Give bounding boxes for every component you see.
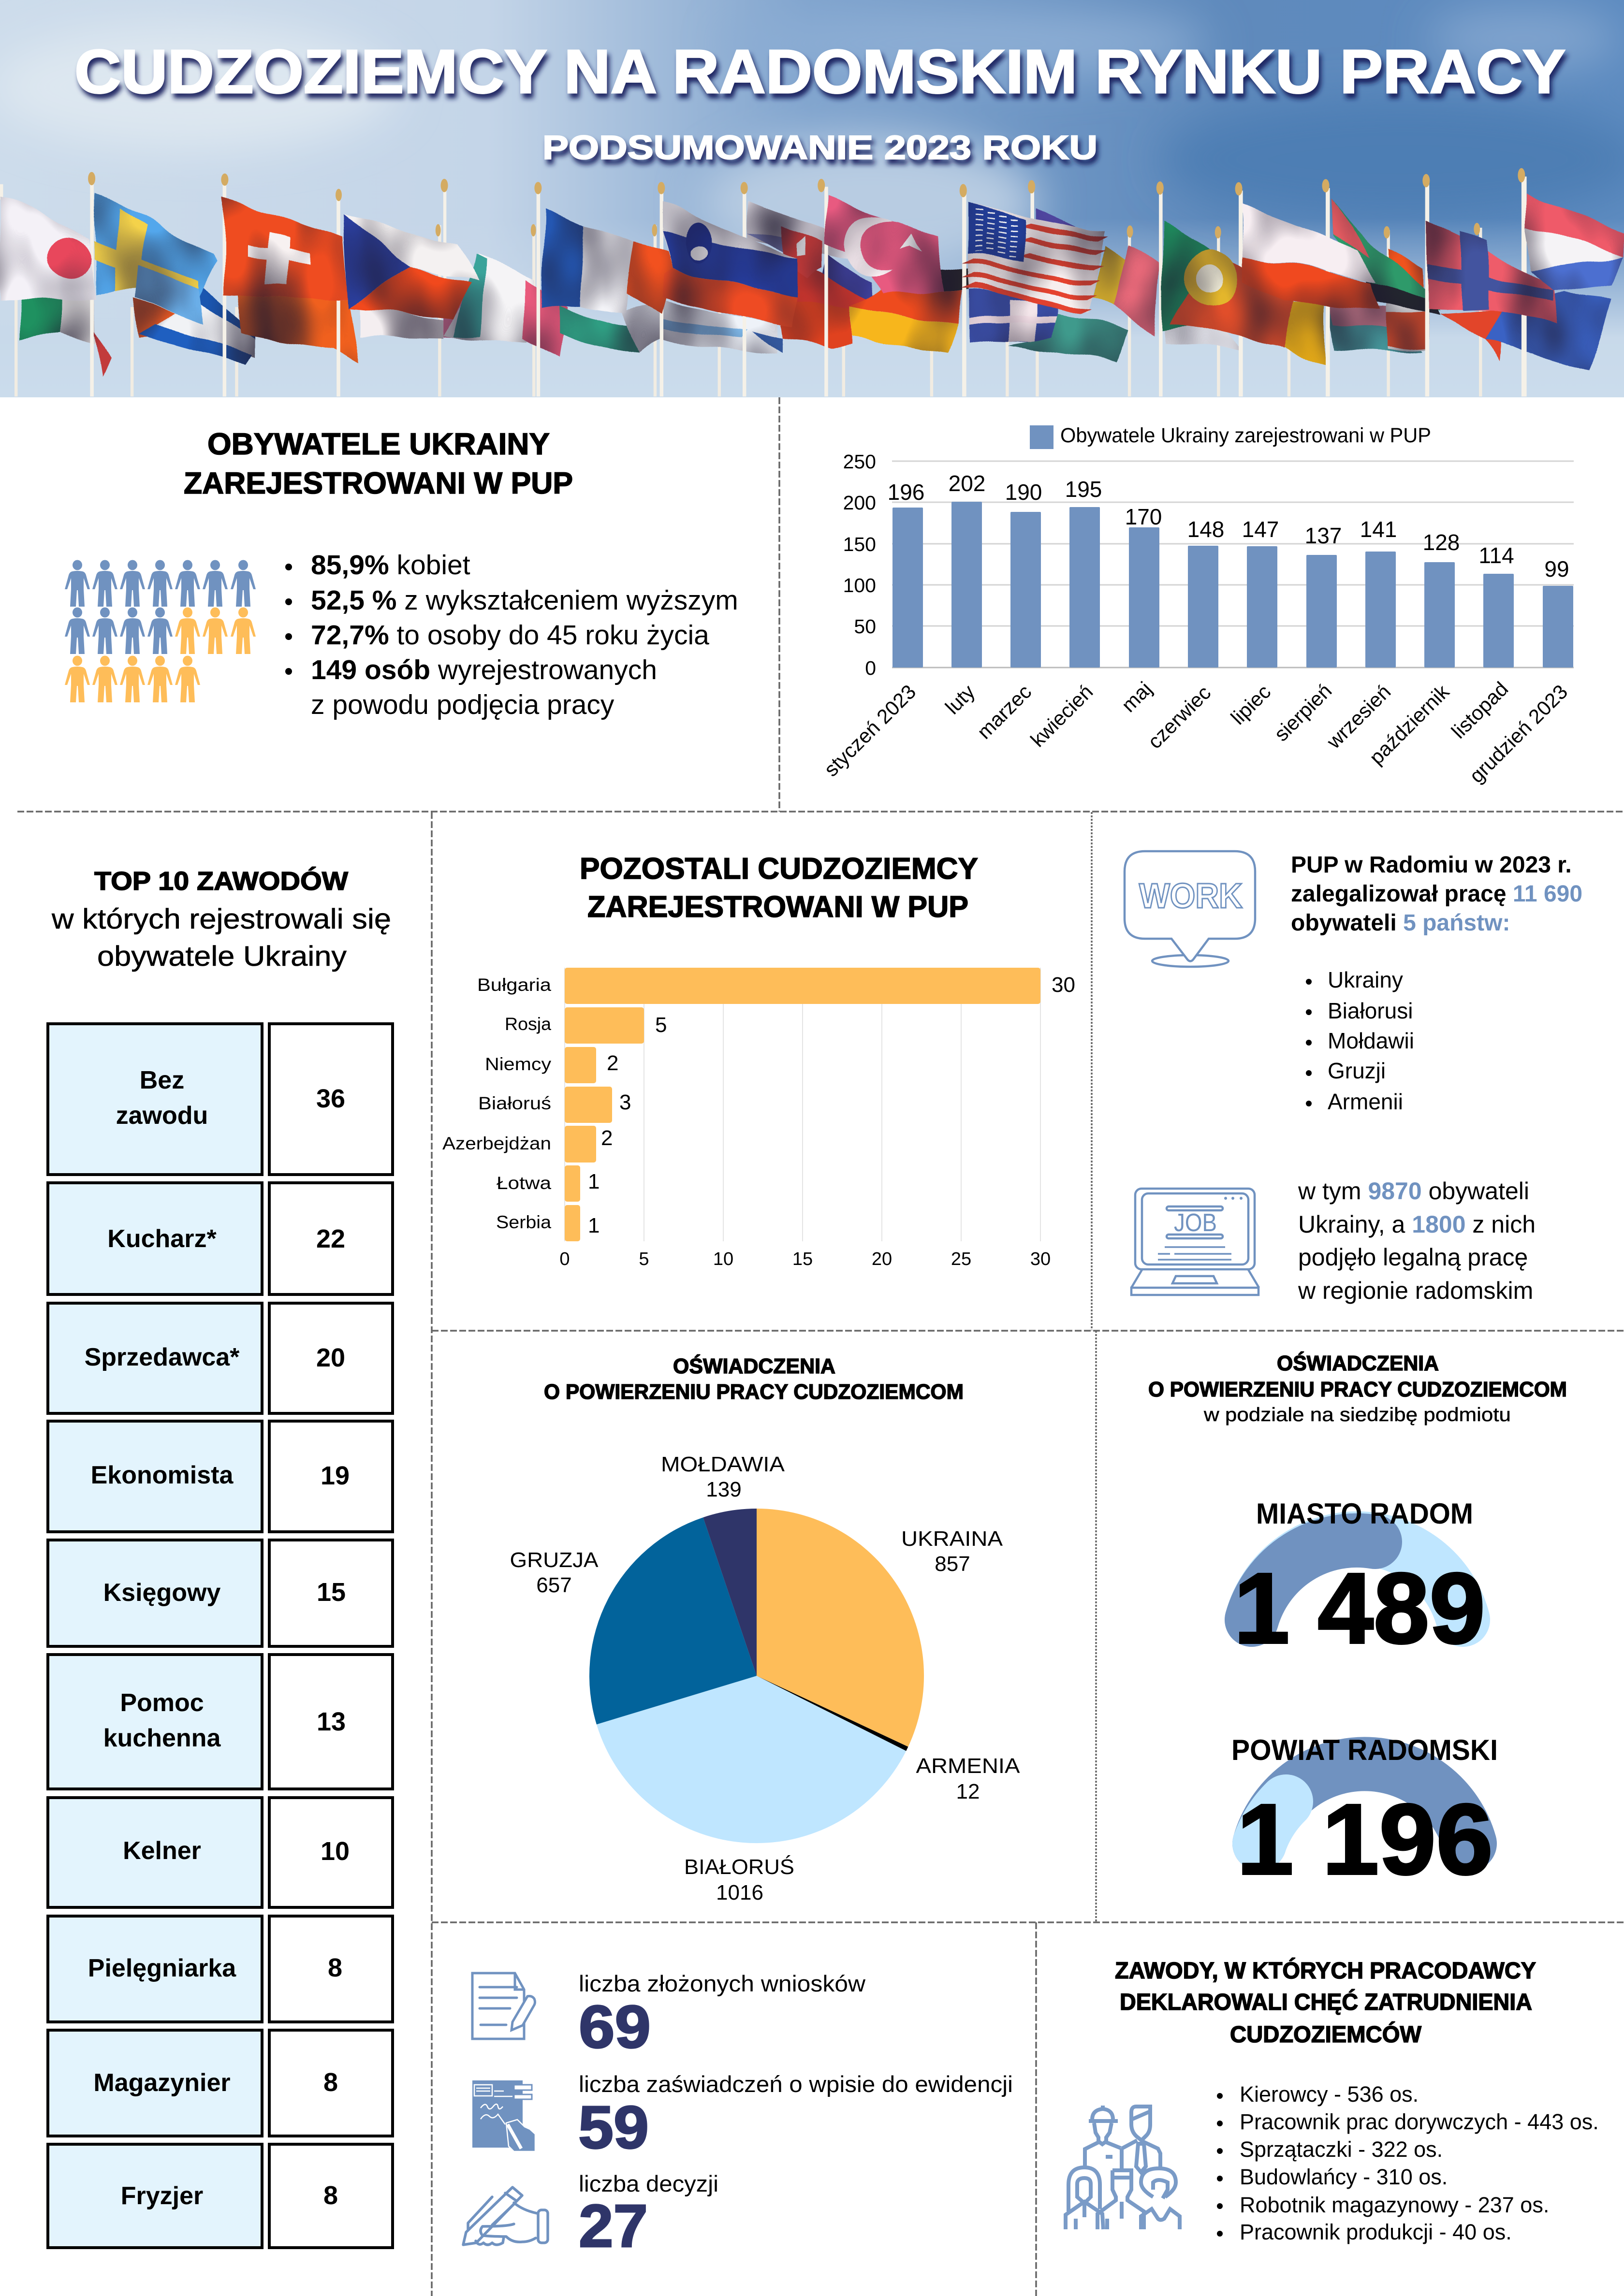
- panel: top 10 occupations: [48, 867, 393, 2248]
- bar chart: Ukrainian citizens by month: sierpień: [1270, 679, 1336, 745]
- heading: Ukrainian citizens: OBYWATELE UKRAINY: [207, 427, 550, 461]
- horizontal bar chart: 3: [619, 1090, 631, 1114]
- gauge: Radom city: [1234, 1497, 1485, 1665]
- bar chart: Ukrainian citizens by month: 195: [1065, 477, 1102, 502]
- pie labels: BIAŁORUŚ: [684, 1854, 794, 1879]
- heading: declarations: O POWIERZENIU PRACY CUDZOZIEMCOM: [544, 1380, 964, 1404]
- bar chart: Ukrainian citizens by month: październik: [1365, 680, 1454, 769]
- icon: work speech bubble: WORK: [1139, 877, 1243, 915]
- icon: group of workers: [1066, 2106, 1180, 2229]
- bullet list: countries: Gruzji: [1328, 1058, 1386, 1083]
- heading: top 10 occupations: obywatele Ukrainy: [97, 941, 347, 972]
- bar chart: Ukrainian citizens by month: 99: [1544, 556, 1569, 581]
- legend: Obywatele Ukrainy zarejestrowani w PUP: [1060, 424, 1431, 447]
- bullet list: statistics: z powodu podjęcia pracy: [311, 689, 614, 720]
- bar chart: Ukrainian citizens by month: luty: [941, 680, 979, 719]
- heading: occupations declared: ZAWODY, W KTÓRYCH PRACODAWCY: [1115, 1957, 1536, 1984]
- table: occupations and counts: 15: [317, 1578, 346, 1607]
- icon: hand writing: [463, 2187, 548, 2245]
- horizontal bar chart: 1: [588, 1170, 600, 1193]
- bullet list: statistics: 72,7% to osoby do 45 roku życia: [311, 620, 709, 651]
- table: occupations and counts: zawodu: [116, 1102, 208, 1130]
- icon: document and pencil: [472, 1973, 535, 2039]
- heading: Ukrainian citizens: [184, 427, 573, 500]
- heading: declarations: OŚWIADCZENIA: [673, 1354, 835, 1378]
- front row flags: [0, 190, 1624, 348]
- bullet list: countries: Białorusi: [1328, 998, 1413, 1023]
- flags and poles: [0, 168, 1624, 396]
- horizontal bar chart: [442, 968, 1075, 1269]
- stat: decisions: 27: [579, 2193, 648, 2260]
- stat: decisions: liczba decyzji: [579, 2171, 718, 2196]
- bar chart: Ukrainian citizens by month: listopad: [1447, 677, 1512, 743]
- icon: job laptop: [1131, 1189, 1259, 1295]
- bar chart: Ukrainian citizens by month: styczeń 2023: [819, 680, 920, 781]
- bullet list: countries: Ukrainy: [1328, 967, 1403, 992]
- bar chart: Ukrainian citizens by month: 137: [1305, 523, 1342, 548]
- bar chart: Ukrainian citizens by month: maj: [1117, 677, 1156, 716]
- bullet list: occupations: Pracownik produkcji - 40 os.: [1240, 2220, 1512, 2244]
- bar chart: Ukrainian citizens by month: marzec: [973, 680, 1036, 743]
- table: occupations and counts: Ekonomista: [91, 1461, 234, 1489]
- table: occupations and counts: Pielęgniarka: [88, 1954, 236, 1982]
- horizontal bar chart: Białoruś: [478, 1093, 551, 1113]
- bullet list: countries: Armenii: [1328, 1089, 1403, 1114]
- horizontal bar chart: Bułgaria: [477, 975, 551, 995]
- pie labels: 657: [536, 1573, 572, 1597]
- bar chart: Ukrainian citizens by month: 147: [1242, 517, 1279, 542]
- text: legalised work summary: PUP w Radomiu w 2023 r.: [1291, 852, 1572, 878]
- bar chart: Ukrainian citizens by month: grudzień 2023: [1465, 680, 1572, 787]
- bullet list: statistics: 85,9% kobiet: [311, 550, 470, 581]
- panel: applications and decisions: [463, 1971, 1013, 2260]
- text: legalised work summary: obywateli 5 państw:: [1291, 910, 1510, 936]
- heading: occupations declared: [1115, 1957, 1536, 2048]
- bar chart: Ukrainian citizens by month: 128: [1423, 530, 1460, 555]
- horizontal bar chart: 30: [1052, 973, 1075, 997]
- table: occupations and counts: [48, 1024, 393, 2248]
- table: occupations and counts: 22: [316, 1224, 345, 1253]
- bullet list: countries: Mołdawii: [1328, 1028, 1414, 1053]
- pie labels: MOŁDAWIA: [661, 1453, 785, 1476]
- title: CUDZOZIEMCY NA RADOMSKIM RYNKU PRACY: [74, 37, 1565, 106]
- bar chart: Ukrainian citizens by month: 0: [865, 657, 876, 679]
- bullet list: countries: [1306, 967, 1414, 1114]
- icon: signed document: [472, 2080, 535, 2151]
- bullet list: statistics: 149 osób wyrejestrowanych: [311, 654, 657, 685]
- icon: job laptop: JOB: [1174, 1209, 1217, 1237]
- heading: declarations by seat: O POWIERZENIU PRACY CUDZOZIEMCOM: [1148, 1378, 1567, 1401]
- table: occupations and counts: Księgowy: [103, 1579, 220, 1607]
- text: Ukrainian citizens legal work: Ukrainy, a 1800 z nich: [1298, 1211, 1536, 1238]
- bullet list: occupations: Budowlańcy - 310 os.: [1240, 2165, 1448, 2189]
- table: occupations and counts: 8: [328, 1953, 342, 1982]
- panel: declarations pie chart: [510, 1354, 1020, 1904]
- bar chart: Ukrainian citizens by month: kwiecień: [1026, 680, 1097, 751]
- horizontal bar chart: 5: [639, 1249, 649, 1269]
- horizontal bar chart: Rosja: [505, 1014, 551, 1034]
- pie labels: 1016: [716, 1881, 763, 1904]
- horizontal bar chart: 30: [1030, 1249, 1051, 1269]
- back row flags: [19, 198, 1610, 375]
- pie labels: ARMENIA: [916, 1754, 1020, 1778]
- icon: pictogram of people: [65, 560, 256, 702]
- stat: decisions: [579, 2171, 718, 2260]
- text: legalised work summary: [1291, 852, 1582, 936]
- stat: register certificates: [578, 2071, 1013, 2161]
- bar chart: Ukrainian citizens by month: lipiec: [1226, 680, 1275, 729]
- table: occupations and counts: 36: [316, 1084, 345, 1113]
- stat: applications: [579, 1971, 866, 2061]
- bullet list: occupations: Pracownik prac dorywczych - 443 os.: [1240, 2109, 1599, 2134]
- panel: other foreigners bar chart: [442, 852, 1075, 1269]
- horizontal bar chart: Łotwa: [497, 1173, 551, 1193]
- stat: applications: liczba złożonych wniosków: [579, 1971, 866, 1996]
- bar chart: Ukrainian citizens by month: 170: [1125, 504, 1162, 529]
- header banner with sky and flags: [0, 0, 1624, 397]
- stat: applications: 69: [579, 1993, 651, 2061]
- bar chart: Ukrainian citizens by month: 148: [1187, 517, 1224, 542]
- text: Ukrainian citizens legal work: podjęło legalną pracę: [1298, 1244, 1528, 1271]
- heading: declarations by seat: OŚWIADCZENIA: [1277, 1351, 1439, 1375]
- text: legalised work summary: zalegalizował pracę 11 690: [1291, 881, 1582, 907]
- stat: register certificates: 59: [578, 2094, 649, 2161]
- heading: occupations declared: DEKLAROWALI CHĘĆ ZATRUDNIENIA: [1120, 1989, 1532, 2015]
- table: occupations and counts: Bez: [140, 1066, 184, 1094]
- text: Ukrainian citizens legal work: w regionie radomskim: [1298, 1277, 1533, 1304]
- bar chart: Ukrainian citizens by month: [819, 424, 1574, 787]
- horizontal bar chart: Niemcy: [485, 1054, 552, 1074]
- bullet list: statistics: 52,5 % z wykształceniem wyższym: [311, 585, 738, 616]
- gauge: Radom city: 1 489: [1234, 1553, 1485, 1665]
- bar chart: Ukrainian citizens by month: wrzesień: [1322, 680, 1395, 753]
- horizontal bar chart: 15: [792, 1249, 813, 1269]
- text: Ukrainian citizens legal work: w tym 9870 obywateli: [1298, 1177, 1529, 1205]
- table: occupations and counts: Kucharz*: [107, 1225, 217, 1253]
- heading: other foreigners: POZOSTALI CUDZOZIEMCY: [580, 852, 978, 886]
- horizontal bar chart: Serbia: [496, 1212, 551, 1232]
- heading: declarations: [544, 1354, 964, 1404]
- icon: work speech bubble: [1125, 851, 1255, 967]
- bar chart: Ukrainian citizens by month: 190: [1005, 480, 1042, 505]
- pie labels: 12: [956, 1780, 980, 1803]
- table: occupations and counts: Magazynier: [93, 2069, 231, 2097]
- heading: Ukrainian citizens: ZAREJESTROWANI W PUP: [184, 466, 573, 500]
- bar chart: Ukrainian citizens by month: 200: [843, 492, 876, 514]
- horizontal bar chart: Azerbejdżan: [442, 1133, 551, 1153]
- table: occupations and counts: 10: [321, 1837, 350, 1866]
- horizontal bar chart: 0: [559, 1249, 570, 1269]
- heading: other foreigners: [580, 852, 978, 924]
- table: occupations and counts: Fryzjer: [121, 2182, 203, 2210]
- pie labels: 857: [935, 1552, 970, 1576]
- table: occupations and counts: Sprzedawca*: [85, 1343, 240, 1371]
- bullet list: statistics: [285, 550, 738, 720]
- heading: top 10 occupations: [51, 867, 391, 972]
- panel: Ukrainian citizens stats: [65, 427, 738, 720]
- horizontal bar chart: 5: [655, 1013, 667, 1037]
- front poles: [0, 168, 1527, 396]
- bar chart: Ukrainian citizens by month: 202: [949, 471, 985, 496]
- gauge: Radom city: MIASTO RADOM: [1256, 1497, 1473, 1530]
- heading: top 10 occupations: w których rejestrowali się: [51, 903, 391, 935]
- bar chart: Ukrainian citizens by month: 114: [1478, 543, 1514, 568]
- bullet list: occupations: Sprzątaczki - 322 os.: [1240, 2137, 1443, 2162]
- panel: occupations employers declared: [1066, 1957, 1599, 2244]
- table: occupations and counts: 13: [317, 1707, 346, 1736]
- bullet list: occupations: Robotnik magazynowy - 237 os.: [1240, 2193, 1549, 2217]
- bar chart: Ukrainian citizens by month: czerwiec: [1143, 681, 1215, 753]
- table: occupations and counts: kuchenna: [103, 1724, 221, 1752]
- gauge: Radom county: 1 196: [1237, 1784, 1493, 1896]
- bullet list: occupations: [1217, 2082, 1599, 2244]
- pie labels: UKRAINA: [901, 1527, 1003, 1551]
- horizontal bar chart: 10: [713, 1249, 733, 1269]
- table: occupations and counts: 19: [321, 1461, 350, 1490]
- heading: occupations declared: CUDZOZIEMCÓW: [1230, 2021, 1422, 2048]
- pie labels: GRUZJA: [510, 1548, 599, 1572]
- pie labels: 139: [706, 1478, 742, 1501]
- pie labels: [510, 1453, 1020, 1904]
- heading: declarations by seat: [1148, 1351, 1567, 1425]
- gauge: Radom county: [1231, 1734, 1498, 1896]
- table: occupations and counts: Kelner: [123, 1837, 201, 1865]
- horizontal bar chart: 20: [872, 1249, 892, 1269]
- table: occupations and counts: 8: [323, 2068, 338, 2097]
- table: occupations and counts: 20: [316, 1343, 345, 1372]
- bar chart: Ukrainian citizens by month: 141: [1360, 517, 1397, 542]
- subtitle: PODSUMOWANIE 2023 ROKU: [542, 129, 1097, 166]
- bar chart: Ukrainian citizens by month: 250: [843, 450, 876, 473]
- table: occupations and counts: 8: [323, 2181, 338, 2210]
- horizontal bar chart: 1: [588, 1214, 600, 1237]
- heading: top 10 occupations: TOP 10 ZAWODÓW: [94, 867, 348, 896]
- panel: legalised work: [1125, 851, 1582, 1304]
- heading: other foreigners: ZAREJESTROWANI W PUP: [587, 890, 968, 924]
- horizontal bar chart: 2: [607, 1051, 618, 1075]
- gauge: Radom county: POWIAT RADOMSKI: [1231, 1734, 1498, 1766]
- panel: declarations by seat: [1148, 1351, 1567, 1896]
- pie chart: [589, 1509, 924, 1843]
- text: Ukrainian citizens legal work: [1298, 1177, 1536, 1304]
- table: occupations and counts: Pomoc: [120, 1689, 204, 1717]
- horizontal bar chart: 2: [601, 1126, 613, 1150]
- stat: register certificates: liczba zaświadczeń o wpisie do ewidencji: [579, 2071, 1013, 2097]
- bar chart: Ukrainian citizens by month: 150: [843, 533, 876, 555]
- horizontal bar chart: 25: [951, 1249, 971, 1269]
- bar chart: Ukrainian citizens by month: 196: [888, 480, 924, 505]
- bullet list: occupations: Kierowcy - 536 os.: [1240, 2082, 1419, 2107]
- bar chart: Ukrainian citizens by month: 50: [854, 615, 876, 638]
- heading: declarations by seat: w podziale na siedzibę podmiotu: [1203, 1404, 1511, 1425]
- bar chart: Ukrainian citizens by month: 100: [843, 574, 876, 596]
